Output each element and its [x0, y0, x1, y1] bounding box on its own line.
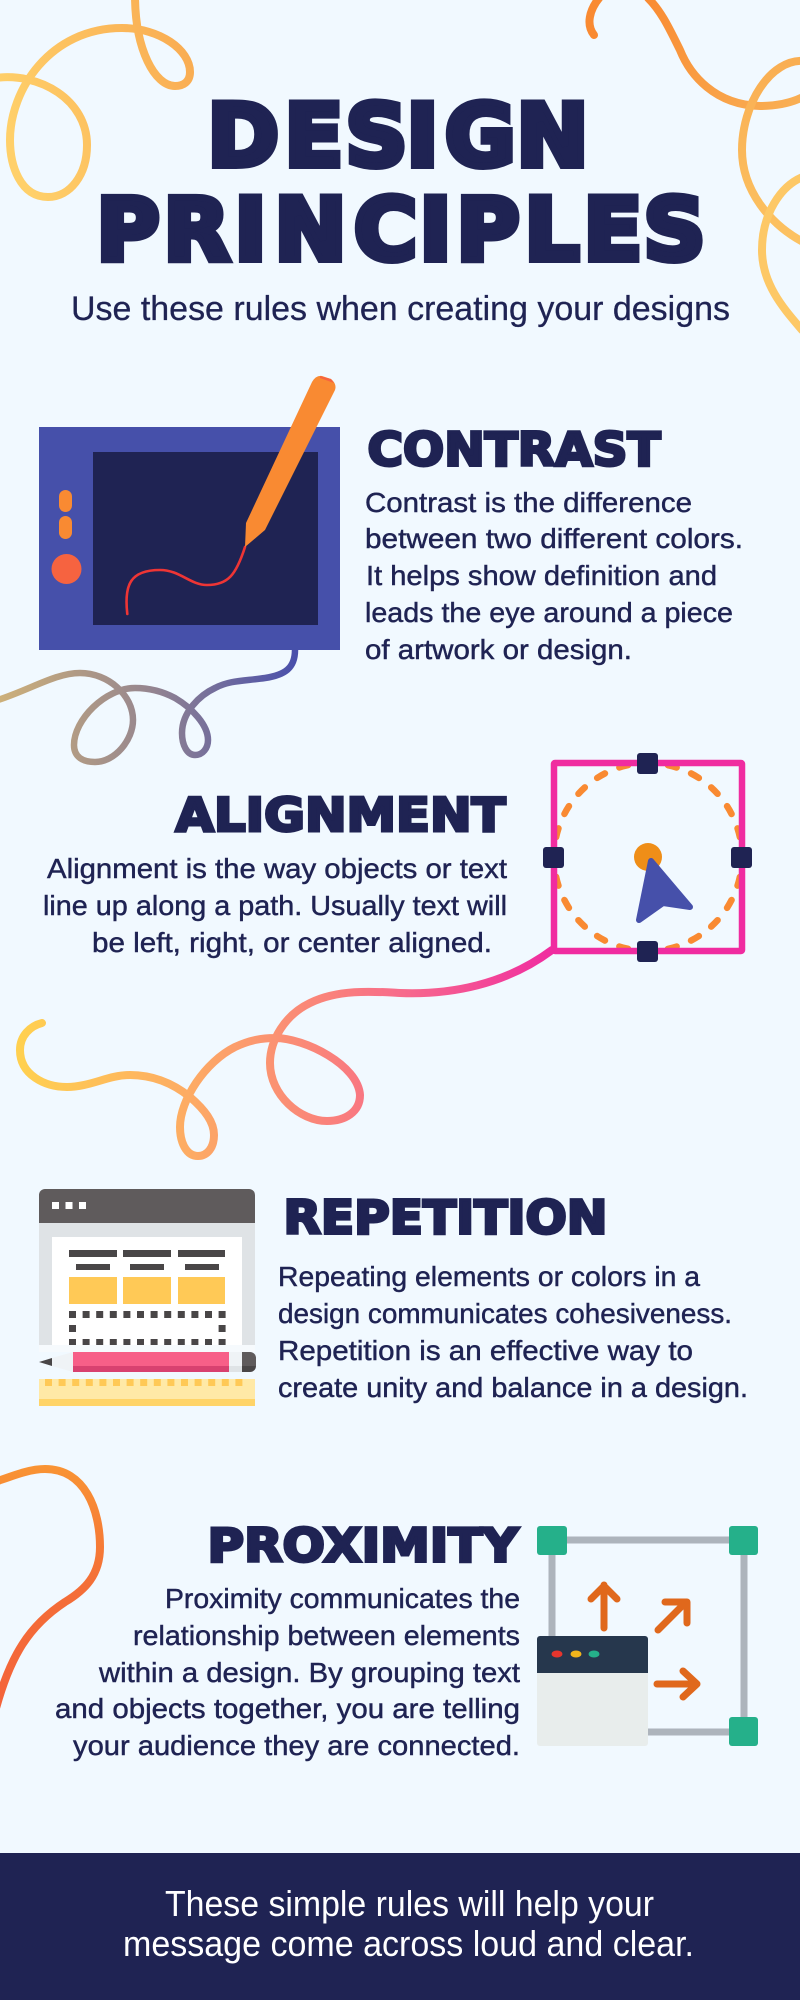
- heading: proximity: PROXIMITY: [208, 1518, 519, 1572]
- footer band: message come across loud and clear.: [123, 1923, 694, 1964]
- text: contrast description: leads the eye around a piece: [365, 597, 733, 628]
- text: repetition description: create unity and balance in a design.: [278, 1372, 748, 1403]
- text: repetition description: design communicates cohesiveness.: [278, 1298, 732, 1329]
- text: alignment description: [43, 853, 507, 958]
- heading: alignment: ALIGNMENT: [176, 788, 506, 842]
- text: contrast description: It helps show definition and: [366, 560, 717, 591]
- icon: drawing tablet with pen: [39, 376, 340, 650]
- text: alignment description: Alignment is the way objects or text: [47, 853, 507, 884]
- footer band: [0, 1853, 800, 2000]
- heading: contrast: CONTRAST: [368, 422, 661, 476]
- heading: repetition: REPETITION: [284, 1190, 608, 1244]
- icon: selection box with cursor: [543, 753, 752, 962]
- text: alignment description: line up along a path. Usually text will: [43, 890, 507, 921]
- squiggle: top left: [0, 0, 190, 197]
- text: proximity description: and objects together, you are telling: [55, 1693, 520, 1724]
- text: repetition description: Repetition is an effective way to: [278, 1335, 693, 1366]
- text: alignment description: be left, right, or center aligned.: [92, 927, 492, 958]
- title: PRINCIPLES: [96, 180, 705, 280]
- subtitle: Use these rules when creating your designs: [71, 290, 730, 328]
- text: proximity description: Proximity communicates the: [165, 1583, 520, 1614]
- squiggle: top right: [589, 0, 800, 330]
- icon: browser window with pencil and ruler: [39, 1189, 256, 1406]
- icon: resizing window frame with arrows: [537, 1526, 758, 1746]
- footer band: These simple rules will help your: [165, 1883, 654, 1924]
- text: contrast description: Contrast is the difference: [365, 487, 692, 518]
- squiggle: tablet cord: [0, 650, 295, 762]
- text: proximity description: [55, 1583, 520, 1761]
- text: proximity description: within a design. By grouping text: [98, 1657, 520, 1688]
- title: DESIGN: [208, 86, 588, 186]
- title: [96, 86, 705, 280]
- squiggle: orange left edge: [0, 1469, 100, 1712]
- text: proximity description: relationship between elements: [133, 1620, 520, 1651]
- text: contrast description: between two different colors.: [365, 523, 743, 554]
- text: contrast description: of artwork or design.: [365, 634, 632, 665]
- squiggle: yellow to pink line: [20, 950, 552, 1156]
- text: repetition description: Repeating elements or colors in a: [278, 1261, 700, 1292]
- text: repetition description: [278, 1261, 748, 1403]
- text: proximity description: your audience they are connected.: [73, 1730, 520, 1761]
- text: contrast description: [365, 487, 743, 665]
